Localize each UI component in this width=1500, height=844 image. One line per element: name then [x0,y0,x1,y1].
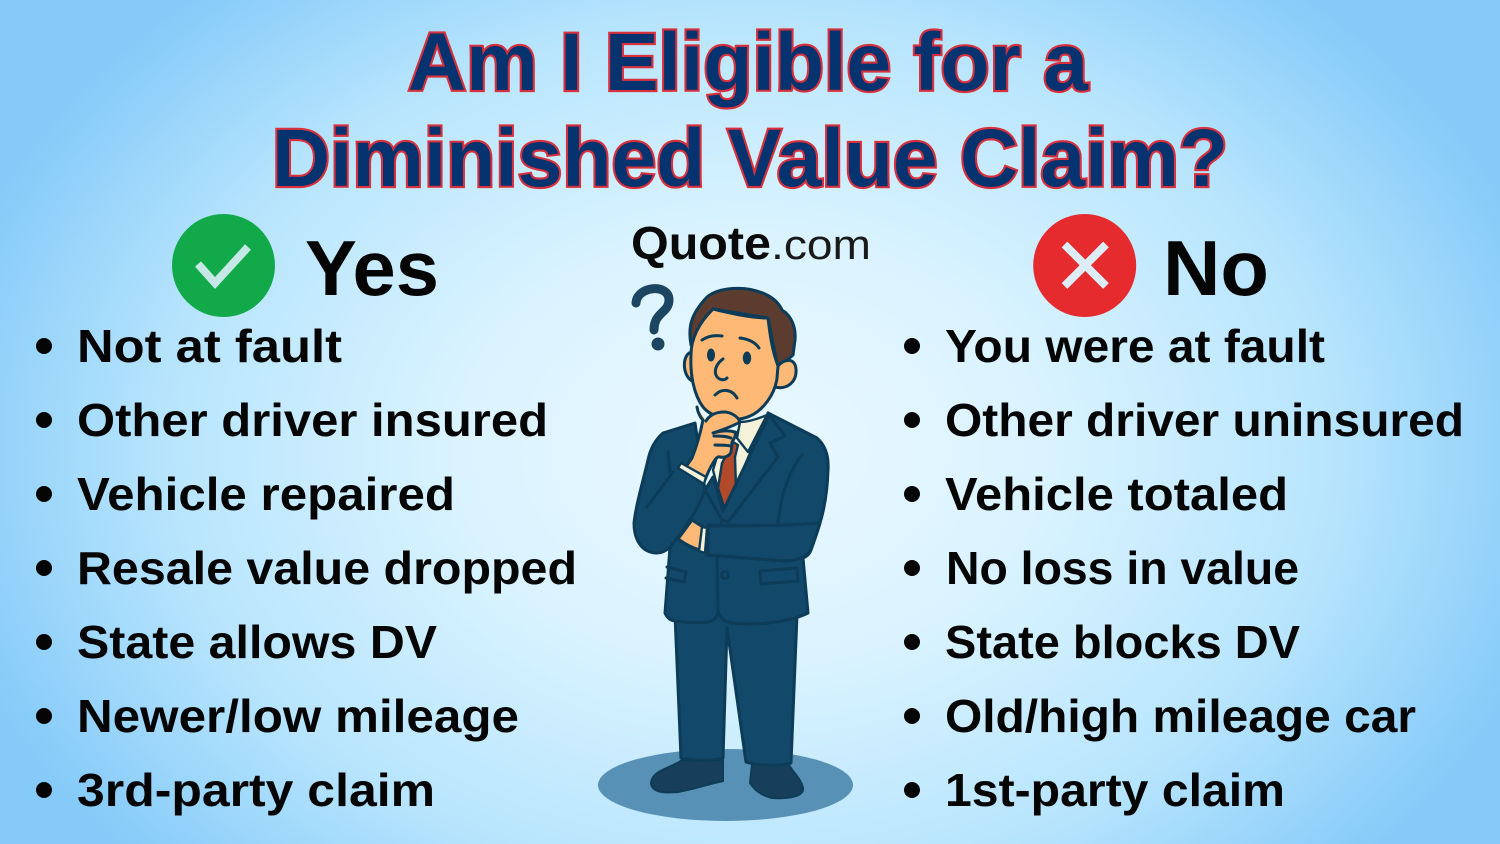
collar [737,415,767,452]
face [691,309,778,419]
no list: You were at fault [945,320,1325,372]
yes list: Vehicle repaired [77,468,455,520]
hair [690,288,795,368]
yes list: Not at fault [77,320,342,372]
necktie [718,442,738,510]
illustration: thinking man [598,288,853,821]
jacket details [647,413,820,612]
trousers [675,615,797,765]
title: Am I Eligible for a [408,17,1089,108]
yes list: Resale value dropped [77,542,577,594]
logo: Quote.com: .com [771,221,871,268]
yes list: 3rd-party claim [77,764,435,816]
no list: 1st-party claim [945,764,1285,816]
thinking hand [685,407,740,480]
no heading: No [1163,224,1269,312]
ears [684,352,796,388]
no list: No loss in value [946,542,1299,594]
title: Diminished Value Claim? [272,113,1228,204]
icon: question mark [636,289,669,350]
shoes [651,760,803,798]
no list: Vehicle totaled [945,468,1288,520]
icon: red cross [1033,214,1136,317]
shirt [713,417,765,512]
no heading [1033,214,1269,317]
no list: Other driver uninsured [945,394,1464,446]
no list: State blocks DV [945,616,1300,668]
upper cuff [678,463,706,484]
panel: yes column [36,214,577,816]
jacket [634,413,828,624]
yes list [36,320,577,816]
panel: no column [904,214,1464,816]
no list [904,320,1464,816]
logo: Quote.com: Quote [631,217,771,269]
yes list: State allows DV [77,616,437,668]
yes list: Other driver insured [77,394,548,446]
yes list: Newer/low mileage [77,690,519,742]
facial features [702,336,759,398]
no list: Old/high mileage car [945,690,1416,742]
icon: green check [172,214,275,317]
lower hand and cuff [678,520,707,553]
yes heading: Yes [305,224,439,312]
title [272,17,1228,204]
logo: Quote.com [631,217,871,269]
ground shadow [598,749,853,821]
yes heading [172,214,439,317]
